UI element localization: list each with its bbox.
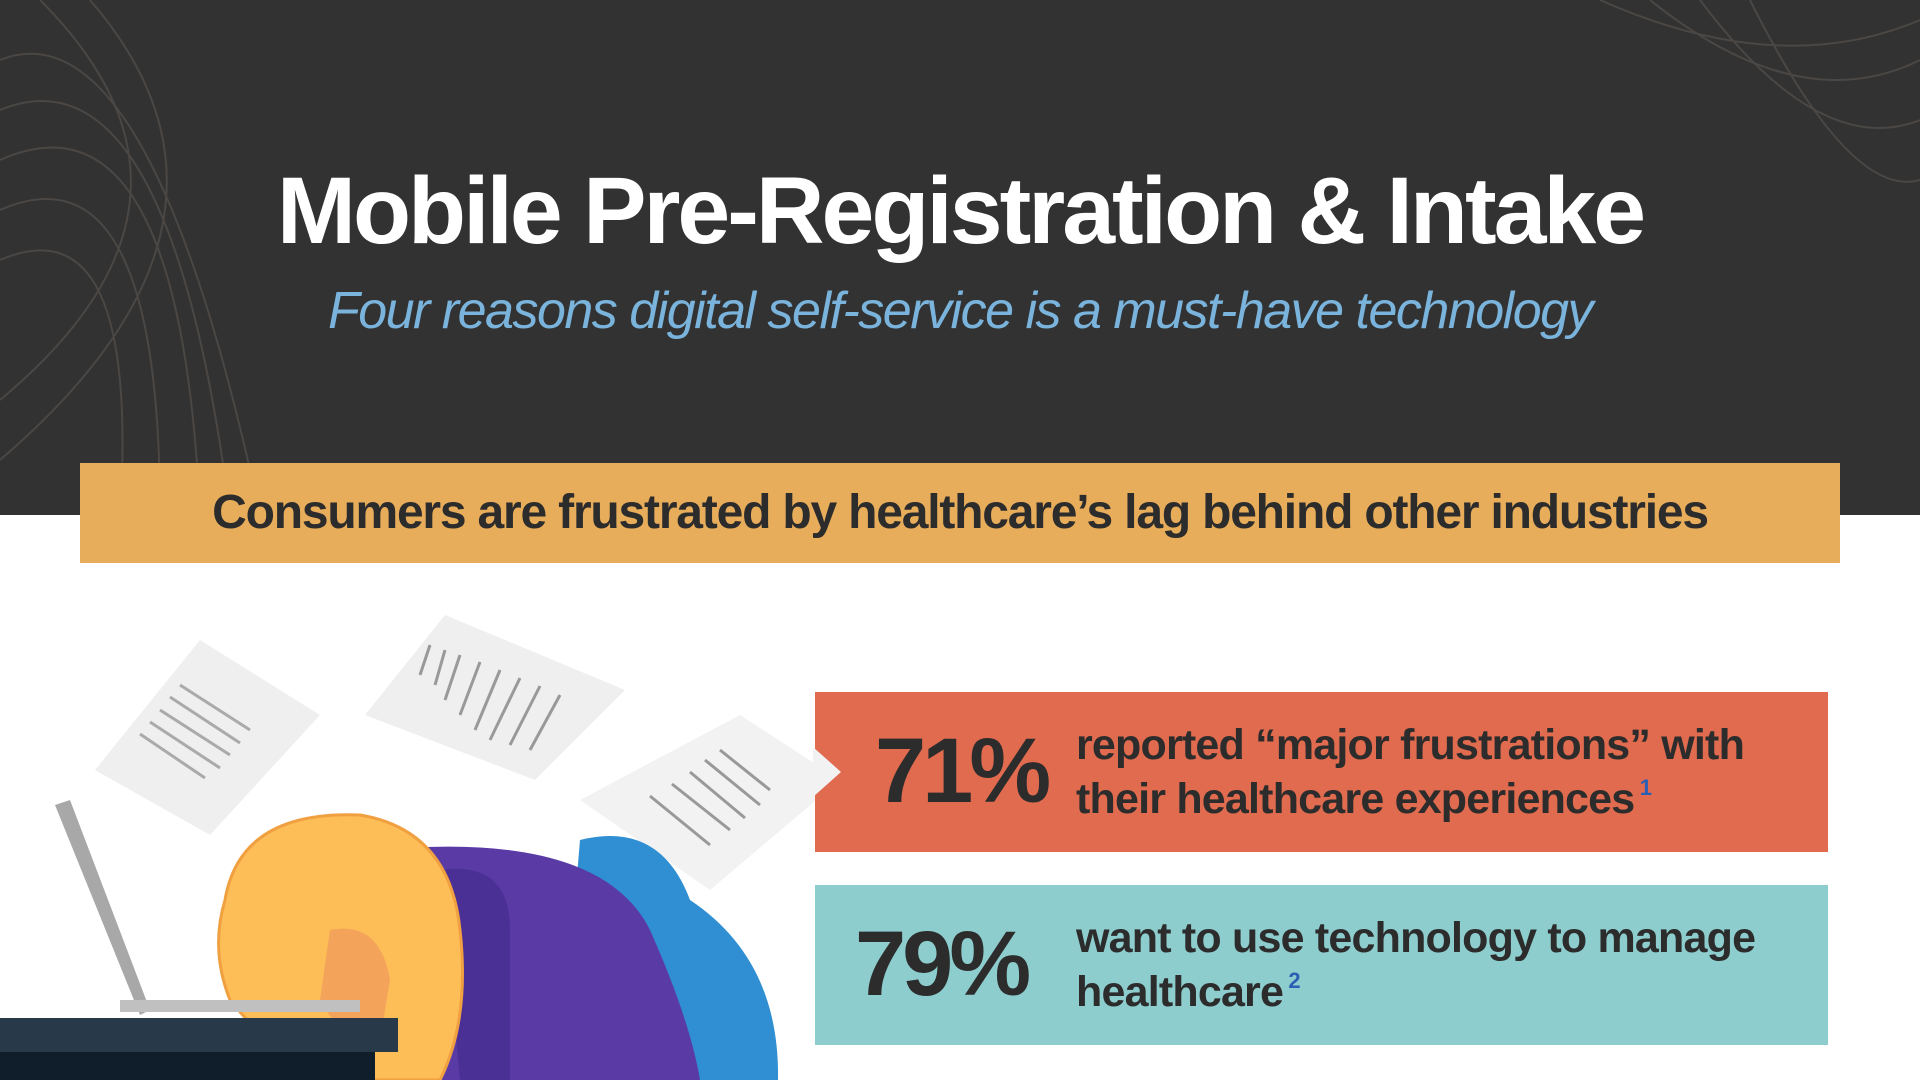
percentage: 79% bbox=[855, 913, 1027, 1015]
hair / head bbox=[219, 815, 462, 1080]
stat box: 79% bbox=[815, 885, 1828, 1045]
illustration: frustrated person at laptop with flying papers bbox=[0, 615, 815, 1080]
desk bbox=[0, 1018, 398, 1052]
percentage: 71% bbox=[875, 720, 1047, 822]
banner heading: Consumers are frustrated by healthcare’s lag behind other industries bbox=[212, 486, 1708, 539]
description bbox=[1076, 721, 1744, 823]
description: their healthcare experiences 1 bbox=[1076, 775, 1651, 823]
stat box: 71% bbox=[815, 692, 1828, 852]
description: healthcare 2 bbox=[1076, 968, 1300, 1016]
title: Mobile Pre-Registration & Intake bbox=[277, 158, 1643, 264]
laptop bbox=[55, 800, 150, 1015]
banner heading bbox=[80, 463, 1840, 563]
chair bbox=[560, 836, 778, 1080]
pointer bbox=[813, 747, 841, 797]
paper 2 bbox=[365, 615, 625, 780]
description: want to use technology to manage bbox=[1076, 914, 1755, 962]
header background bbox=[0, 0, 1920, 515]
body bbox=[380, 847, 700, 1080]
paper 3 bbox=[580, 715, 840, 890]
description: reported “major frustrations” with bbox=[1076, 721, 1744, 769]
subtitle: Four reasons digital self-service is a must-have technology bbox=[328, 282, 1592, 340]
paper 1 bbox=[95, 640, 320, 835]
description bbox=[1076, 914, 1755, 1016]
